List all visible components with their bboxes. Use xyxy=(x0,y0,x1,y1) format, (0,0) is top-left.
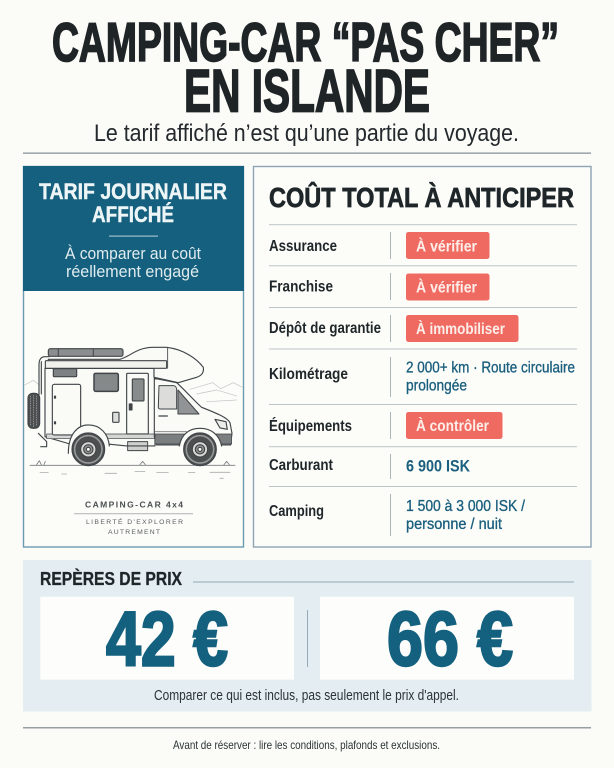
illustration caption: AUTREMENT xyxy=(108,529,160,536)
subtitle: Le tarif affiché n’est qu’une partie du voyage. xyxy=(94,120,519,147)
panel header: réellement engagé xyxy=(66,263,199,281)
cab xyxy=(154,378,232,445)
row: camping xyxy=(269,498,525,533)
row: camping: personne / nuit xyxy=(406,516,502,533)
row: assurance: À vérifier xyxy=(416,236,477,256)
wheel arches xyxy=(68,425,109,453)
title: EN ISLANDE xyxy=(184,58,430,124)
panel header: À comparer au coût xyxy=(65,244,201,263)
entry door xyxy=(127,373,148,434)
row: dépôt de garantie: À immobiliser xyxy=(416,319,505,338)
row: franchise: À vérifier xyxy=(416,278,477,296)
row: kilométrage: prolongée xyxy=(406,378,467,394)
row: carburant xyxy=(269,456,471,476)
panel: coût total à anticiper xyxy=(254,166,591,547)
panel header: TARIF JOURNALIER xyxy=(39,179,227,204)
steps xyxy=(128,442,148,451)
row: camping: Camping xyxy=(269,503,324,520)
spare tire xyxy=(28,393,40,428)
row: camping: 1 500 à 3 000 ISK / xyxy=(406,498,525,515)
row: franchise xyxy=(269,274,490,300)
side window xyxy=(94,373,118,391)
title xyxy=(52,11,559,124)
alcove xyxy=(48,347,203,383)
mountains xyxy=(25,380,243,402)
illustration caption xyxy=(74,500,193,536)
ground xyxy=(30,461,235,478)
row: franchise: Franchise xyxy=(269,278,333,296)
row: assurance xyxy=(269,232,490,259)
hatch xyxy=(113,412,119,422)
row: dépôt de garantie xyxy=(269,315,518,342)
panel: tarif journalier affiché xyxy=(23,166,244,547)
camper body xyxy=(45,368,155,446)
row: kilométrage: 2 000+ km · Route circulaire xyxy=(406,360,575,376)
front wheel xyxy=(184,433,216,466)
price card: 66 euros: 66 € xyxy=(387,596,513,682)
rear ladder xyxy=(39,357,49,395)
panel: repères de prix xyxy=(23,560,592,712)
price card: 42 euros xyxy=(40,596,294,682)
illustration caption: LIBERTÉ D'EXPLORER xyxy=(86,517,183,526)
panel header xyxy=(23,166,244,291)
roof awning xyxy=(48,349,123,356)
illustration caption: CAMPING-CAR 4x4 xyxy=(85,500,183,510)
footer note: Avant de réserver : lire les conditions, plafonds et exclusions. xyxy=(173,738,440,752)
hitch xyxy=(38,433,47,447)
price card: 66 euros xyxy=(320,596,574,682)
row: kilométrage: Kilométrage xyxy=(269,366,348,383)
rear vent xyxy=(53,369,77,377)
row: équipements xyxy=(269,412,502,439)
price note: Comparer ce qui est inclus, pas seulement le prix d'appel. xyxy=(154,688,459,704)
row: assurance: Assurance xyxy=(269,238,337,255)
locker door xyxy=(52,384,81,435)
rear wheel xyxy=(72,433,105,466)
row: équipements: À contrôler xyxy=(416,416,489,435)
row: carburant: 6 900 ISK xyxy=(406,456,471,476)
section heading: REPÈRES DE PRIX xyxy=(40,568,182,589)
row: carburant: Carburant xyxy=(269,457,334,474)
row: équipements: Équipements xyxy=(269,416,352,435)
price card: 42 euros: 42 € xyxy=(106,596,228,682)
panel header: AFFICHÉ xyxy=(92,202,174,227)
row: dépôt de garantie: Dépôt de garantie xyxy=(269,320,381,337)
row: kilométrage xyxy=(269,360,575,394)
illustration: camping-car 4x4 xyxy=(25,347,243,478)
